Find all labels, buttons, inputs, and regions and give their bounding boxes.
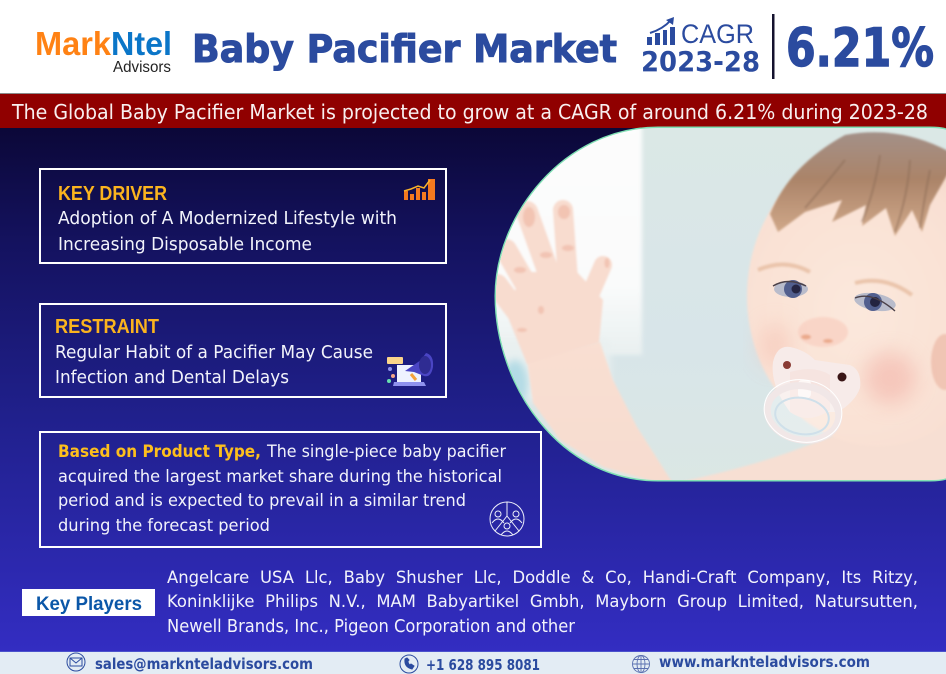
- eyes: [773, 280, 897, 314]
- photo: baby with pacifier: [480, 120, 946, 485]
- arm: [527, 342, 672, 482]
- logo: MarkNtel Advisors: Mark: [35, 25, 112, 62]
- key players last line: Newell Brands, Inc., Pigeon Corporation and other: [167, 617, 576, 637]
- gradient background panel: [0, 128, 946, 652]
- icon: segmented pie with people: [490, 502, 524, 536]
- title: Baby Pacifier Market: [192, 27, 617, 71]
- text: restraint description: [55, 342, 373, 388]
- icon: email: [67, 653, 85, 671]
- divider: [772, 14, 774, 79]
- phone number: +1 628 895 8081: [426, 656, 540, 674]
- text: product type description: during the forecast period: [58, 516, 270, 536]
- email address: sales@marknteladvisors.com: [95, 655, 313, 673]
- pacifier shield: [773, 347, 860, 412]
- panel: restraint: [40, 304, 446, 397]
- heading: key driver: KEY DRIVER: [58, 183, 167, 205]
- highlighted lead: Based on Product Type,: [58, 442, 261, 462]
- nose: [798, 317, 848, 347]
- CAGR block: [641, 17, 760, 78]
- red banner: [0, 94, 946, 128]
- icon: phone: [400, 655, 418, 673]
- panel: key driver: [40, 169, 446, 263]
- text: product type description: The single-piece baby pacifier: [266, 442, 506, 462]
- head: [746, 176, 946, 436]
- text: restraint description: Regular Habit of a Pacifier May Cause: [55, 342, 373, 363]
- cheeks: [759, 326, 792, 364]
- website: www.marknteladvisors.com: [659, 653, 870, 671]
- text: key driver description: Adoption of A Modernized Lifestyle with: [58, 208, 397, 229]
- heading: restraint: RESTRAINT: [55, 316, 159, 338]
- text: key driver description: Increasing Disposable Income: [58, 234, 312, 255]
- period label: 2023-28: [641, 45, 760, 78]
- key players list line one: Angelcare USA Llc, Baby Shusher Llc, Doddle & Co, Handi-Craft Company, Its Ritzy,: [167, 568, 918, 587]
- icon: rising bars with arrow: [647, 17, 675, 45]
- key players label: [22, 589, 155, 616]
- text: product type description: acquired the largest market share during the historical: [58, 467, 502, 487]
- text: key driver description: [58, 208, 397, 255]
- CAGR label: CAGR: [681, 19, 754, 49]
- text: product type description: [58, 442, 506, 536]
- logo: MarkNtel Advisors: Advisors: [113, 59, 171, 76]
- text: restraint description: Infection and Dental Delays: [55, 367, 289, 388]
- logo: MarkNtel Advisors: [35, 25, 172, 76]
- key players label: Key Players: [36, 594, 142, 615]
- icon: growth chart: [404, 179, 435, 200]
- text: product type description: period and is expected to prevail in a similar trend: [58, 491, 466, 511]
- hair: [770, 132, 946, 236]
- hand: [497, 210, 603, 364]
- icon: laptop and megaphone: [387, 353, 433, 386]
- eyebrows: [758, 264, 912, 295]
- logo: MarkNtel Advisors: Ntel: [111, 25, 172, 62]
- key players list line two: Koninklijke Philips N.V., MAM Babyartikel Gmbh, Mayborn Group Limited, Natursutten,: [167, 592, 918, 611]
- shoulder and chest: [688, 424, 946, 480]
- panel: product type insight: [40, 432, 541, 547]
- pacifier ring: [764, 379, 842, 444]
- header band: [0, 0, 946, 94]
- icon: globe: [632, 656, 650, 672]
- footer: [0, 651, 946, 674]
